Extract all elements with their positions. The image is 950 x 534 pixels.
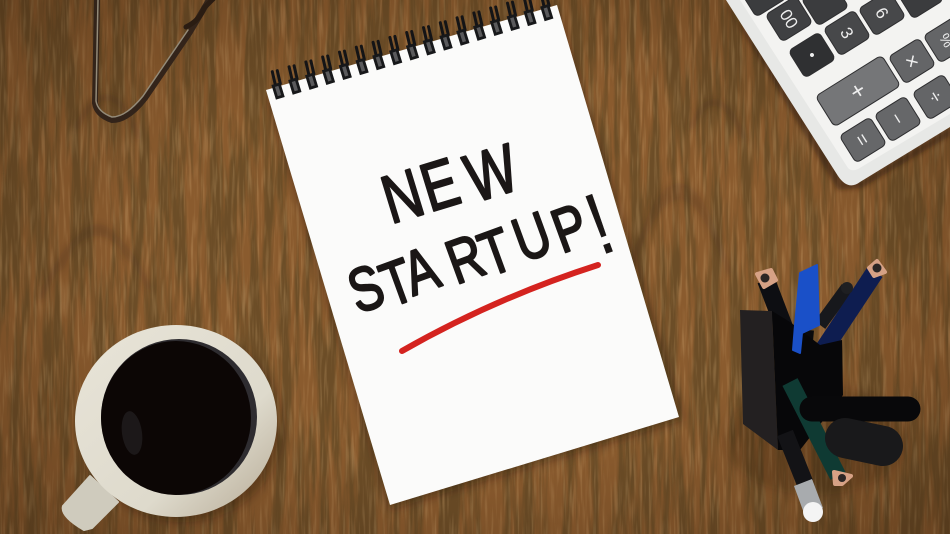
blue pen cap bbox=[793, 265, 819, 353]
handwritten heading: E bbox=[412, 143, 468, 226]
upper pens bbox=[766, 272, 875, 380]
mug body bbox=[75, 325, 277, 517]
calculator key labels: 6 bbox=[871, 4, 892, 22]
red underline bbox=[402, 265, 598, 351]
handwritten heading: R bbox=[437, 220, 493, 297]
calculator key labels: − bbox=[885, 109, 909, 129]
pencil tips bbox=[757, 270, 776, 287]
glasses bbox=[95, 0, 214, 120]
pen holder bbox=[725, 261, 908, 522]
handwritten heading: N bbox=[373, 154, 432, 238]
handwritten heading: A bbox=[394, 233, 448, 309]
handwritten heading: T bbox=[371, 245, 423, 320]
calculator key labels bbox=[776, 4, 950, 150]
calculator key labels: 3 bbox=[836, 24, 857, 42]
calculator key labels: 00 bbox=[776, 6, 802, 32]
handwritten heading: U bbox=[504, 198, 560, 275]
calculator key labels: ÷ bbox=[923, 87, 946, 107]
calculator bbox=[726, 0, 950, 190]
holder box bbox=[740, 310, 778, 450]
coffee mug bbox=[63, 325, 283, 530]
handwritten heading: ! bbox=[574, 175, 625, 273]
calculator key labels: • bbox=[809, 47, 815, 64]
notebook bbox=[266, 0, 684, 510]
calculator key labels: = bbox=[850, 130, 874, 150]
handwritten heading: S bbox=[339, 251, 393, 327]
handwritten heading: T bbox=[470, 214, 521, 290]
calculator keys bbox=[739, 0, 950, 163]
mug handle bbox=[63, 476, 118, 530]
spiral binding bbox=[272, 0, 552, 98]
notebook page bbox=[266, 5, 679, 505]
lower pens bbox=[785, 382, 908, 483]
calculator key labels: × bbox=[899, 50, 925, 73]
handwritten heading bbox=[339, 126, 625, 358]
handwritten heading: P bbox=[543, 190, 597, 266]
coffee surface bbox=[101, 339, 257, 495]
calculator key labels: + bbox=[842, 78, 873, 104]
handwritten heading: W bbox=[456, 129, 527, 217]
